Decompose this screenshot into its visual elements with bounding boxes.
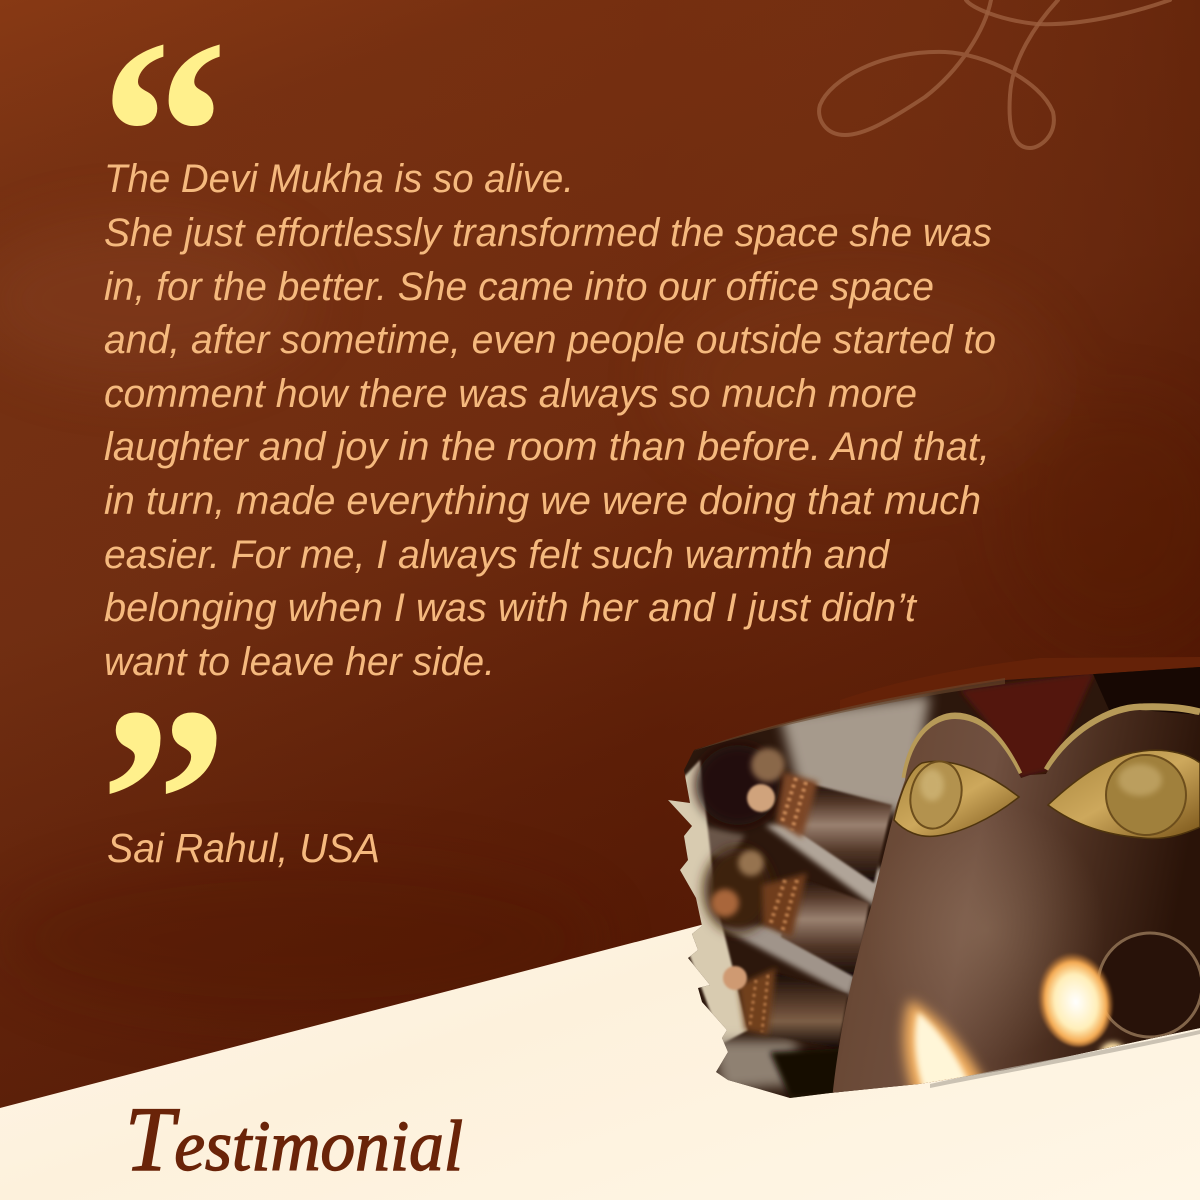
testimonial quote text: in, for the better. She came into our office space	[104, 265, 934, 309]
cream diagonal footer panel	[0, 790, 1200, 1200]
brush stroke along photo top	[690, 678, 1005, 752]
lamp flame right	[1038, 952, 1114, 1048]
testimonial quote text: She just effortlessly transformed the space she was	[104, 211, 992, 255]
brush-edged photo of Devi Mukha	[660, 650, 1200, 1110]
testimonial quote text: in turn, made everything we were doing that much	[104, 479, 981, 523]
cheek highlight	[908, 847, 1076, 1018]
photo backdrop	[660, 650, 1200, 1110]
lamp flame left	[904, 1000, 990, 1100]
closing quotation mark: ”	[100, 652, 228, 951]
heading: Testimonial: Testimonial	[125, 1088, 463, 1190]
testimonial quote text: laughter and joy in the room than before. And that,	[104, 425, 990, 469]
brown band above photo	[840, 657, 1200, 712]
nose ring	[1098, 933, 1200, 1037]
gold brows	[905, 707, 1200, 778]
author attribution: Sai Rahul, USA	[107, 825, 380, 871]
arm three	[723, 966, 848, 1048]
grey brush stroke along photo bottom	[930, 1030, 1200, 1088]
arms with bangles	[696, 745, 892, 1048]
testimonial quote text: The Devi Mukha is so alive.	[104, 157, 574, 201]
mask face	[832, 710, 1200, 1100]
arm one	[696, 745, 892, 883]
decorative swirl	[819, 0, 1170, 148]
testimonial quote text: comment how there was always so much more	[104, 372, 917, 416]
left gold eye	[894, 756, 1019, 836]
lamp flame small	[1096, 1038, 1126, 1050]
testimonial quote text: belonging when I was with her and I just didn’t	[104, 586, 918, 630]
testimonial quote text	[104, 157, 996, 684]
testimonial quote text: and, after sometime, even people outside started to	[104, 318, 996, 362]
testimonial quote text: easier. For me, I always felt such warmth and	[104, 533, 891, 577]
testimonial quote text: want to leave her side.	[104, 640, 495, 684]
arm two	[704, 848, 869, 978]
right gold eye	[1048, 750, 1200, 839]
